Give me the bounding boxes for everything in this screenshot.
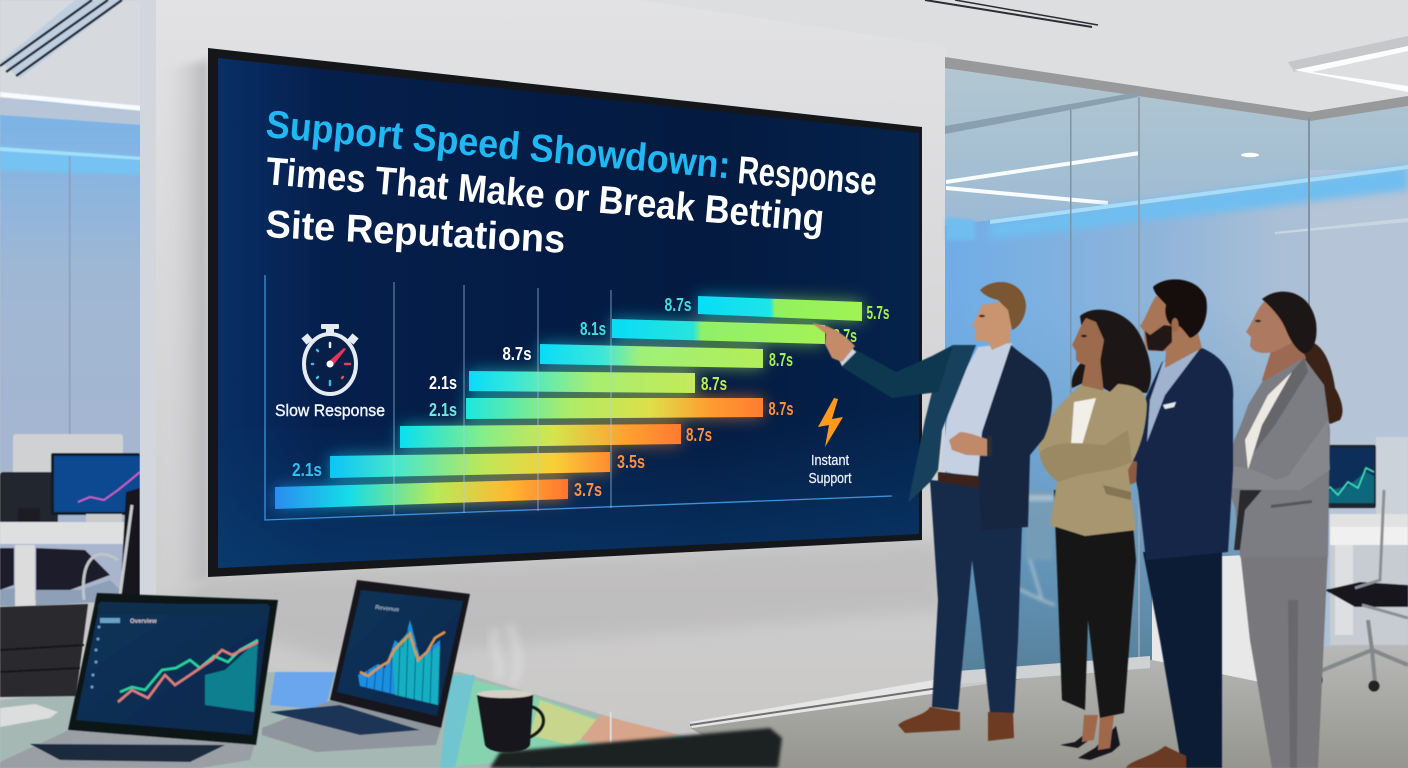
blouse [1245, 372, 1292, 470]
title: Times That Make or Break Betting [264, 150, 826, 241]
ponytail [1302, 342, 1342, 424]
blazer [1223, 358, 1330, 557]
main white wall [155, 0, 945, 728]
icon: stopwatch [301, 324, 359, 394]
background room furniture behind glass [1010, 490, 1055, 605]
label: instant support: Support [808, 470, 852, 487]
neck and face [1140, 296, 1202, 368]
cuff [838, 348, 856, 366]
crossed arm [1040, 430, 1132, 482]
icon: lightning bolt [818, 398, 843, 447]
gridlines [394, 282, 611, 515]
steam [493, 625, 518, 685]
screen bezel [208, 48, 922, 577]
crossed arm [1224, 420, 1330, 490]
laptop header text: Overview [130, 619, 157, 625]
value labels: 8.7s [686, 425, 712, 445]
trousers [930, 480, 1022, 713]
value labels: 3.5s [617, 452, 645, 472]
white cabinet right [1152, 555, 1260, 682]
trousers [1054, 490, 1136, 718]
shirt [940, 343, 1012, 480]
hair [1072, 310, 1151, 393]
papers on table [0, 704, 58, 727]
right jacket [978, 345, 1052, 530]
value labels: 8.7s [502, 344, 532, 364]
laptop screen [68, 593, 278, 745]
ceiling right [640, 0, 1408, 115]
value labels: 2.1s [292, 460, 322, 480]
shirt [1147, 346, 1202, 442]
foreground chair back [490, 728, 782, 768]
laptop: right [262, 580, 470, 752]
face [1072, 318, 1104, 366]
blazer [1038, 384, 1147, 536]
hair [1262, 292, 1316, 354]
teal open jacket [908, 345, 976, 503]
label: instant support [808, 452, 852, 487]
laptop chart [205, 640, 258, 712]
coffee mug [477, 690, 543, 752]
wall display screen [208, 48, 922, 577]
title: Support Speed Showdown: [264, 103, 732, 187]
background right desk and monitor [1312, 437, 1408, 692]
shoe [1126, 746, 1186, 768]
ear [1172, 318, 1178, 332]
axis lines [265, 275, 892, 520]
jacket [1132, 348, 1233, 560]
screen reflection on table [270, 672, 335, 710]
value labels: 3.7s [574, 480, 602, 500]
value labels [292, 295, 890, 500]
person: woman in beige blazer [1038, 310, 1151, 760]
eye [1081, 335, 1087, 337]
left room section [0, 0, 145, 607]
value labels: 8.7s [664, 295, 692, 315]
title [264, 103, 878, 262]
chart: response-time bars [265, 275, 892, 520]
title: Site Reputations [265, 203, 566, 262]
beard [1145, 325, 1172, 351]
value labels: 8.7s [768, 399, 794, 419]
neck and face [972, 300, 1020, 350]
glass partition [945, 60, 1408, 680]
white top [1071, 398, 1096, 445]
value labels: 8.1s [580, 319, 606, 339]
trousers [1143, 552, 1222, 768]
value labels: 8.7s [833, 326, 857, 346]
shoes [1060, 730, 1092, 748]
shoes [898, 707, 960, 733]
trousers [1240, 550, 1328, 768]
ankles [1082, 715, 1098, 742]
laptop: left [0, 593, 278, 768]
screen panel [218, 58, 919, 568]
floor [690, 640, 1408, 768]
eye [979, 315, 985, 317]
laptop base [262, 700, 441, 752]
hair [1153, 279, 1207, 338]
laptop base [0, 730, 255, 768]
wall shadow below screen [170, 540, 945, 660]
gesturing hand [949, 432, 990, 456]
label: slow response: Slow Response [275, 401, 385, 420]
person: woman in grey suit [1223, 292, 1342, 768]
value labels: 8.7s [769, 350, 793, 370]
value labels: 5.7s [866, 303, 890, 323]
value labels: 8.7s [701, 374, 727, 394]
bars [275, 296, 862, 509]
neck [1262, 340, 1306, 395]
belt [938, 472, 979, 488]
value labels: 2.1s [429, 400, 457, 420]
conference table [0, 672, 780, 768]
chair foreground left [0, 604, 88, 697]
pointing arm [840, 345, 953, 398]
laptop sidebar [90, 618, 120, 688]
laptop header text: Revenue [375, 605, 400, 614]
label: instant support: Instant [811, 452, 850, 469]
laptop screen [330, 580, 470, 728]
neck [1080, 358, 1104, 395]
face [1246, 300, 1298, 353]
laptop chart [358, 620, 440, 705]
hair [980, 282, 1026, 330]
value labels: 2.1s [429, 373, 457, 393]
person: bearded man in navy suit [1095, 279, 1233, 768]
hand [1095, 459, 1137, 484]
eye [1255, 320, 1261, 322]
chart glow [275, 296, 862, 509]
title: Response [736, 149, 878, 204]
pocket square [1163, 402, 1176, 409]
person: presenter pointing at chart [812, 282, 1052, 741]
pointing hand [812, 323, 855, 362]
